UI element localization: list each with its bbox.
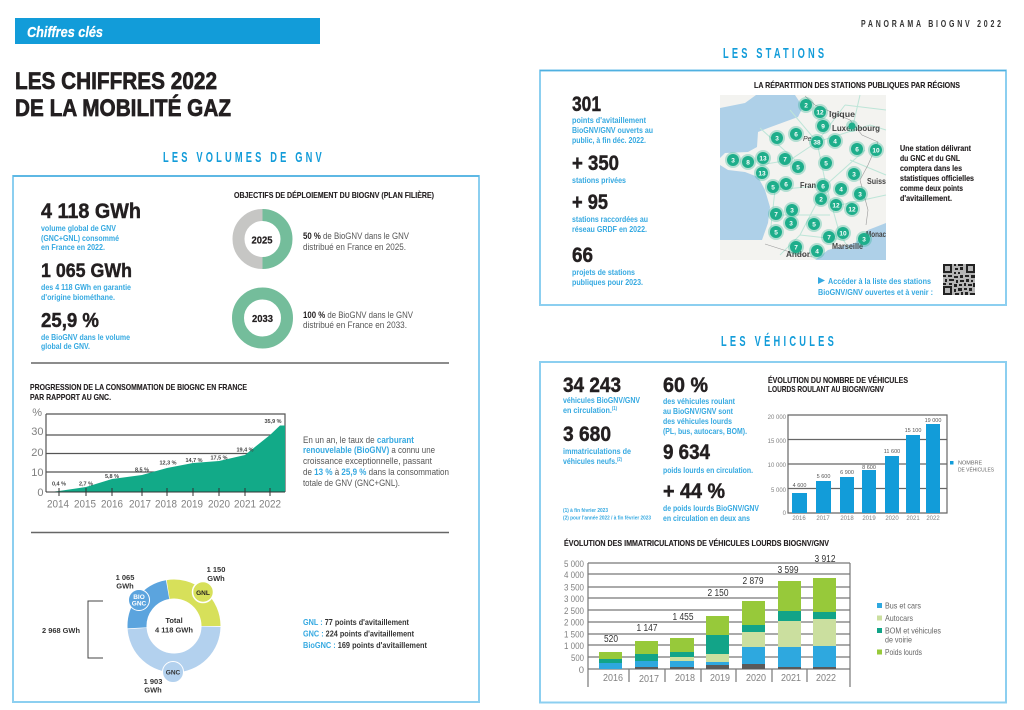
area chart: progression BioGNC: 10 bbox=[31, 467, 44, 479]
stacked bar chart: immatriculations: 2 500 bbox=[564, 606, 584, 617]
bar chart: véhicules lourds roulant: 2019 bbox=[862, 516, 876, 522]
stacked bar chart: immatriculations: 3 912 bbox=[814, 554, 836, 565]
area chart: progression BioGNC: 2,7 % bbox=[79, 482, 93, 488]
key figures: stations: 301 bbox=[572, 93, 601, 116]
map: stations par région: 2 bbox=[819, 196, 823, 203]
bar chart: véhicules lourds roulant: 20 000 bbox=[768, 415, 787, 421]
map: stations par région: 3 bbox=[731, 157, 735, 164]
note: comptage des stations: du GNC et du GNL bbox=[900, 154, 960, 163]
donut: répartition GNL GNC BioGNC bbox=[116, 565, 225, 694]
map: stations par région: 2 bbox=[804, 102, 808, 109]
bracket: 2 968 GWh: 2 968 GWh bbox=[42, 626, 80, 635]
key figures: stations: + 350 bbox=[572, 152, 619, 175]
title: LES CHIFFRES 2022 bbox=[15, 68, 217, 95]
area chart: progression BioGNC: % bbox=[32, 407, 42, 419]
key figures: volumes: (GNC+GNL) consommé bbox=[41, 233, 119, 243]
legend: nombre de véhicules bbox=[950, 460, 994, 474]
link: liste des stations: Accéder à la liste des stations bbox=[828, 276, 931, 286]
key figures: véhicules colonne 2: 9 634 bbox=[663, 441, 710, 464]
footnotes: (2) pour l'année 2022 / à fin février 2023 bbox=[563, 516, 651, 522]
bar chart: véhicules lourds roulant: 4 600 bbox=[793, 483, 806, 489]
text: objectif 2033: distribué en France en 2033. bbox=[303, 320, 407, 330]
map: stations par région: 7 bbox=[783, 156, 787, 163]
donut: répartition GNL GNC BioGNC: 1 903 bbox=[144, 677, 162, 686]
donut: répartition GNL GNC BioGNC: 1 065 bbox=[116, 573, 134, 582]
map: stations par région: 5 bbox=[824, 160, 828, 167]
map: stations par région: 3 bbox=[775, 135, 779, 142]
note: comptage des stations: comme deux points bbox=[900, 184, 963, 193]
text: objectif 2025: distribué en France en 2025. bbox=[303, 242, 406, 252]
donut: répartition GNL GNC BioGNC: GWh bbox=[144, 686, 162, 694]
header: Panorama BioGNV 2022: PANORAMA BIOGNV 2022 bbox=[861, 18, 1001, 29]
area chart: progression BioGNC: 12,3 % bbox=[159, 460, 177, 466]
banner: Chiffres clés bbox=[15, 18, 320, 44]
legend: catégories de véhicules bbox=[877, 600, 941, 657]
area chart: progression BioGNC: 30 bbox=[31, 426, 44, 438]
map: stations par région: 9 bbox=[821, 123, 825, 130]
panel: les stations bbox=[540, 70, 1006, 305]
key figures: stations: réseau GRDF en 2022. bbox=[572, 224, 647, 234]
key figures: véhicules colonne 1: 34 243 bbox=[563, 374, 621, 397]
heading: progression de la consommation: PAR RAPPORT AU GNC. bbox=[30, 393, 111, 402]
map: stations par région: 13 bbox=[759, 155, 767, 162]
map: stations par région: 10 bbox=[872, 147, 880, 154]
map: stations par région: Luxembourg bbox=[832, 124, 880, 133]
bars: 2018 bbox=[670, 638, 694, 669]
key figures: volumes: en France en 2022. bbox=[41, 242, 105, 252]
icon: QR code bbox=[943, 264, 975, 295]
stacked bar chart: immatriculations: 520 bbox=[604, 634, 618, 645]
key figures: volumes bbox=[41, 200, 141, 351]
key figures: stations: stations privées bbox=[572, 175, 626, 185]
key figures: stations: + 95 bbox=[572, 191, 608, 214]
panel: les véhicules bbox=[540, 362, 1006, 702]
bar chart: véhicules lourds roulant: 2017 bbox=[816, 516, 830, 522]
map: stations par région: 6 bbox=[794, 131, 798, 138]
map: stations par région: 5 bbox=[771, 184, 775, 191]
area chart: progression BioGNC: 2021 bbox=[234, 498, 256, 510]
map: stations par région: Andor bbox=[786, 250, 810, 259]
bar chart: véhicules lourds roulant: 15 100 bbox=[905, 428, 921, 434]
key figures: stations: 66 bbox=[572, 244, 593, 267]
text: objectif 2025: 50 % de BioGNV dans le GNV bbox=[303, 231, 409, 241]
note: comptage des stations: comptera dans les bbox=[900, 164, 962, 173]
bar chart: véhicules lourds roulant: 2021 bbox=[906, 516, 920, 522]
map: stations par région: 3 bbox=[862, 236, 866, 243]
bar chart: véhicules lourds roulant: 10 000 bbox=[768, 463, 787, 469]
key figures: véhicules colonne 2: de poids lourds BioGNV/GNV bbox=[663, 503, 759, 513]
area chart: progression BioGNC: 2022 bbox=[259, 498, 281, 510]
map: stations par région: 8 bbox=[746, 159, 750, 166]
key figures: véhicules colonne 2: 60 % bbox=[663, 374, 708, 397]
map: stations par région: Suiss bbox=[867, 177, 886, 186]
text: commentaire progression: renouvelable (BioGNV) a connu une bbox=[303, 445, 435, 456]
legend: nombre de véhicules: NOMBRE bbox=[958, 460, 982, 466]
note: comptage des stations: d'avitaillement. bbox=[900, 194, 952, 203]
stacked bar chart: immatriculations: 2022 bbox=[816, 673, 836, 684]
stacked bar chart: immatriculations: 2021 bbox=[781, 673, 801, 684]
map: stations par région: Pe bbox=[803, 136, 812, 143]
legend: points d'avitaillement: GNC : 224 points d'avitaillement bbox=[303, 630, 414, 638]
key figures: stations: BioGNV/GNV ouverts au bbox=[572, 125, 653, 135]
stacked bar chart: immatriculations: 0 bbox=[579, 665, 584, 676]
stacked bar chart: immatriculations: 2018 bbox=[675, 673, 695, 684]
link: liste des stations bbox=[818, 276, 933, 297]
bars: 2017 bbox=[635, 641, 658, 669]
legend: nombre de véhicules: DE VÉHICULES bbox=[958, 466, 994, 474]
heading: évolution du nombre de véhicules: ÉVOLUTION DU NOMBRE DE VÉHICULES bbox=[768, 375, 908, 385]
bar chart: véhicules lourds roulant: 15 000 bbox=[768, 439, 787, 445]
text: commentaire progression: croissance exceptionnelle, passant bbox=[303, 456, 432, 467]
key figures: volumes: des 4 118 GWh en garantie bbox=[41, 282, 131, 292]
stacked bar chart: immatriculations: 2 150 bbox=[708, 588, 729, 599]
map: stations par région: 12 bbox=[832, 202, 840, 209]
donut: répartition GNL GNC BioGNC: BIO bbox=[133, 594, 145, 601]
bar chart: véhicules lourds roulant: 5 600 bbox=[817, 474, 830, 480]
donut: objectif 2025: 2025 bbox=[252, 236, 273, 246]
map: stations par région: 5 bbox=[796, 164, 800, 171]
heading: les stations: LES STATIONS bbox=[723, 45, 824, 62]
map: stations par région: 12 bbox=[848, 206, 856, 213]
stacked bar chart: immatriculations: 3 599 bbox=[778, 565, 799, 576]
link: liste des stations: BioGNV/GNV ouvertes et à venir : bbox=[818, 287, 933, 297]
stacked bar chart: immatriculations: 1 000 bbox=[564, 641, 584, 652]
note: comptage des stations: statistiques officielles bbox=[900, 174, 974, 183]
donut: répartition GNL GNC BioGNC: 4 118 GWh bbox=[155, 626, 193, 634]
key figures: véhicules colonne 1: 3 680 bbox=[563, 423, 611, 446]
area chart: progression BioGNC: 0 bbox=[37, 487, 44, 499]
map: stations par région: 5 bbox=[774, 229, 778, 236]
map: stations par région: 3 bbox=[858, 191, 862, 198]
bars: 2021 bbox=[778, 581, 801, 669]
area chart: progression BioGNC bbox=[31, 407, 285, 510]
legend: points d'avitaillement bbox=[303, 618, 427, 650]
heading: évolution des immatriculations: ÉVOLUTION DES IMMATRICULATIONS DE VÉHICULES LOURDS BIOGNV/GNV bbox=[564, 538, 829, 548]
key figures: véhicules colonne 2: au BioGNV/GNV sont bbox=[663, 406, 733, 416]
heading: progression de la consommation: PROGRESSION DE LA CONSOMMATION DE BIOGNC EN FRANCE bbox=[30, 383, 247, 392]
map: stations par région: 4 bbox=[833, 138, 837, 145]
stacked bar chart: immatriculations: 1 500 bbox=[564, 630, 584, 640]
key figures: véhicules colonne 2: (PL, bus, autocars, BOM). bbox=[663, 426, 747, 436]
map: stations par région: 6 bbox=[784, 181, 788, 188]
stacked bar chart: immatriculations: 2 879 bbox=[742, 576, 764, 587]
bar chart: véhicules lourds roulant bbox=[768, 415, 947, 522]
key figures: véhicules colonne 2 bbox=[663, 374, 759, 523]
bar chart: véhicules lourds roulant: 2018 bbox=[840, 516, 854, 522]
bar chart: véhicules lourds roulant: 8 600 bbox=[862, 465, 876, 471]
stacked bar chart: immatriculations: 500 bbox=[571, 653, 584, 664]
key figures: véhicules colonne 1: immatriculations de bbox=[563, 446, 631, 456]
stacked bar chart: immatriculations: 3 000 bbox=[564, 594, 584, 605]
title: DE LA MOBILITÉ GAZ bbox=[15, 94, 231, 122]
map: stations par région: 13 bbox=[758, 170, 766, 177]
bars: 2020 bbox=[742, 601, 765, 669]
heading: les véhicules: LES VÉHICULES bbox=[721, 332, 834, 350]
key figures: véhicules colonne 2: des véhicules lourds bbox=[663, 416, 732, 426]
map: stations par région: 38 bbox=[813, 139, 821, 146]
donut: objectif 2025 bbox=[238, 215, 286, 263]
bars: 2022 bbox=[813, 578, 836, 669]
map: stations par région: Marseille bbox=[832, 242, 863, 251]
area chart: progression BioGNC: 19,4 % bbox=[236, 448, 254, 454]
footnotes bbox=[563, 508, 651, 522]
text: objectif 2025 bbox=[303, 231, 409, 252]
map: stations par région: 4 bbox=[839, 186, 843, 193]
heading: objectifs de déploiement: OBJECTIFS DE DÉPLOIEMENT DU BIOGNV (PLAN FILIÈRE) bbox=[234, 190, 434, 200]
map: stations par région: 12 bbox=[816, 109, 824, 116]
area chart: progression BioGNC: 2020 bbox=[208, 498, 230, 510]
legend: catégories de véhicules: Poids lourds bbox=[885, 647, 922, 657]
key figures: véhicules colonne 1: (2) bbox=[617, 457, 622, 463]
donut: objectif 2033 bbox=[238, 294, 287, 342]
area chart: progression BioGNC: 14,7 % bbox=[185, 458, 203, 464]
donut: répartition GNL GNC BioGNC: GWh bbox=[207, 574, 225, 583]
legend: catégories de véhicules: Bus et cars bbox=[885, 600, 921, 610]
donut: répartition GNL GNC BioGNC: 1 150 bbox=[207, 565, 225, 574]
stacked bar chart: immatriculations: 2016 bbox=[603, 673, 623, 684]
key figures: véhicules colonne 2: des véhicules roulant bbox=[663, 396, 735, 406]
donut: répartition GNL GNC BioGNC: GNC bbox=[166, 670, 181, 676]
map: stations par région: 3 bbox=[790, 207, 794, 214]
key figures: volumes: d'origine biométhane. bbox=[41, 292, 115, 302]
stacked bar chart: immatriculations: 5 000 bbox=[564, 559, 584, 570]
bar chart: véhicules lourds roulant: 19 000 bbox=[925, 418, 941, 424]
donut: objectif 2033: 2033 bbox=[252, 314, 273, 325]
area chart: progression BioGNC: 2015 bbox=[74, 498, 96, 510]
key figures: véhicules colonne 1: en circulation. bbox=[563, 405, 621, 415]
bar chart: véhicules lourds roulant: 0 bbox=[783, 511, 787, 517]
heading: évolution du nombre de véhicules bbox=[768, 375, 908, 394]
key figures: véhicules colonne 1 bbox=[563, 374, 640, 466]
text: commentaire progression: totale de GNV (GNC+GNL). bbox=[303, 478, 400, 489]
bar chart: véhicules lourds roulant: 2016 bbox=[792, 516, 806, 522]
stacked bar chart: immatriculations: 2 000 bbox=[564, 618, 584, 628]
bar chart: véhicules lourds roulant: 11 600 bbox=[884, 449, 900, 455]
bar chart: véhicules lourds roulant: 6 900 bbox=[840, 470, 854, 476]
donut: répartition GNL GNC BioGNC: GWh bbox=[116, 582, 134, 590]
title bbox=[15, 68, 231, 122]
key figures: véhicules colonne 2: poids lourds en circulation. bbox=[663, 465, 753, 475]
bar chart: véhicules lourds roulant: 2020 bbox=[885, 516, 899, 522]
donut: répartition GNL GNC BioGNC: GNC bbox=[132, 600, 147, 608]
bars: 2019 bbox=[706, 616, 729, 669]
map: stations par région: 7 bbox=[794, 244, 798, 251]
key figures: véhicules colonne 2: + 44 % bbox=[663, 480, 725, 503]
map: stations par région: 4 bbox=[815, 248, 819, 255]
area chart: progression BioGNC: 2016 bbox=[101, 498, 123, 510]
key figures: véhicules colonne 1: véhicules BioGNV/GNV bbox=[563, 395, 640, 405]
key figures: stations bbox=[572, 93, 653, 287]
area chart: progression BioGNC: 17,5 % bbox=[210, 456, 228, 462]
legend: catégories de véhicules: Autocars bbox=[885, 613, 913, 623]
heading: les volumes de GNV: LES VOLUMES DE GNV bbox=[163, 149, 322, 166]
key figures: véhicules colonne 1: (1) bbox=[612, 406, 617, 412]
heading: évolution du nombre de véhicules: LOURDS ROULANT AU BIOGNV/GNV bbox=[768, 385, 884, 394]
map: stations par région: Monac bbox=[866, 230, 886, 239]
legend: catégories de véhicules: BOM et véhicules bbox=[885, 626, 941, 636]
area chart: progression BioGNC: 0,4 % bbox=[52, 482, 66, 488]
map: stations par région: lgique bbox=[829, 110, 856, 119]
bars: 2016 bbox=[599, 652, 622, 669]
area chart: progression BioGNC: 2018 bbox=[155, 498, 177, 510]
key figures: véhicules colonne 1: véhicules neufs. bbox=[563, 456, 630, 466]
donut: répartition GNL GNC BioGNC: GNL bbox=[196, 590, 210, 597]
legend: points d'avitaillement: GNL : 77 points d'avitaillement bbox=[303, 618, 409, 627]
key figures: stations: publiques pour 2023. bbox=[572, 277, 643, 287]
map: stations par région: 7 bbox=[827, 234, 831, 241]
key figures: véhicules colonne 2: en circulation en deux ans bbox=[663, 513, 750, 523]
note: comptage des stations bbox=[900, 144, 974, 203]
key figures: volumes: volume global de GNV bbox=[41, 223, 116, 233]
stacked bar chart: immatriculations: 1 147 bbox=[636, 623, 658, 634]
stacked bar chart: immatriculations: 2019 bbox=[710, 673, 730, 684]
map: stations par région: 6 bbox=[821, 183, 825, 190]
stacked bar chart: immatriculations: 2020 bbox=[746, 673, 766, 684]
donut: répartition GNL GNC BioGNC: Total bbox=[165, 616, 183, 625]
map: stations par région: 5 bbox=[812, 221, 816, 228]
map: stations par région: 3 bbox=[852, 171, 856, 178]
area chart: progression BioGNC: 2017 bbox=[129, 498, 151, 510]
heading: répartition par régions: LA RÉPARTITION DES STATIONS PUBLIQUES PAR RÉGIONS bbox=[754, 80, 960, 90]
text: objectif 2033 bbox=[303, 310, 413, 330]
area chart: progression BioGNC: 2014 bbox=[47, 498, 69, 510]
key figures: volumes: 1 065 GWh bbox=[41, 260, 132, 282]
map: stations par région: 10 bbox=[839, 230, 847, 237]
legend: catégories de véhicules: de voirie bbox=[885, 634, 912, 644]
stacked bar chart: immatriculations: 1 455 bbox=[672, 612, 694, 623]
stacked bar chart: immatriculations: 2017 bbox=[639, 674, 659, 685]
key figures: stations: points d'avitaillement bbox=[572, 115, 646, 125]
bar chart: véhicules lourds roulant: 2022 bbox=[926, 516, 940, 522]
bracket: 2 968 GWh bbox=[42, 601, 103, 658]
map: stations par région bbox=[720, 95, 886, 260]
map: stations par région: 6 bbox=[855, 146, 859, 153]
key figures: stations: stations raccordées au bbox=[572, 214, 648, 224]
key figures: stations: public, à fin déc. 2022. bbox=[572, 135, 646, 145]
stacked bar chart: immatriculations: 4 000 bbox=[564, 570, 584, 581]
legend: points d'avitaillement: BioGNC : 169 points d'avitaillement bbox=[303, 641, 427, 650]
heading: progression de la consommation bbox=[30, 383, 247, 402]
area chart: progression BioGNC: 5,8 % bbox=[105, 474, 119, 480]
key figures: volumes: 25,9 % bbox=[41, 310, 99, 332]
key figures: stations: projets de stations bbox=[572, 267, 635, 277]
text: commentaire progression: En un an, le taux de carburant bbox=[303, 435, 415, 446]
area chart: progression BioGNC: 8,5 % bbox=[135, 468, 149, 474]
text: commentaire progression: de 13 % à 25,9 % dans la consommation bbox=[303, 467, 449, 478]
key figures: volumes: 4 118 GWh bbox=[41, 200, 141, 223]
banner: Chiffres clés: Chiffres clés bbox=[27, 24, 103, 41]
note: comptage des stations: Une station délivrant bbox=[900, 144, 971, 153]
area chart: progression BioGNC: 35,9 % bbox=[264, 419, 282, 425]
text: objectif 2033: 100 % de BioGNV dans le GNV bbox=[303, 310, 413, 320]
map: stations par région: 3 bbox=[789, 220, 793, 227]
bar chart: véhicules lourds roulant: 5 000 bbox=[771, 488, 787, 494]
stacked bar chart: immatriculations: 3 500 bbox=[564, 582, 584, 594]
map: stations par région: Fran bbox=[800, 181, 816, 190]
key figures: volumes: de BioGNV dans le volume bbox=[41, 332, 130, 342]
panel: volumes de GNV bbox=[13, 176, 479, 702]
text: commentaire progression bbox=[303, 435, 449, 489]
area chart: progression BioGNC: 2019 bbox=[181, 498, 203, 510]
key figures: volumes: global de GNV. bbox=[41, 341, 90, 351]
map: stations par région: 7 bbox=[774, 211, 778, 218]
area chart: progression BioGNC: 20 bbox=[31, 447, 44, 459]
stacked bar chart: immatriculations bbox=[564, 554, 850, 687]
footnotes: (1) à fin février 2023 bbox=[563, 508, 608, 514]
